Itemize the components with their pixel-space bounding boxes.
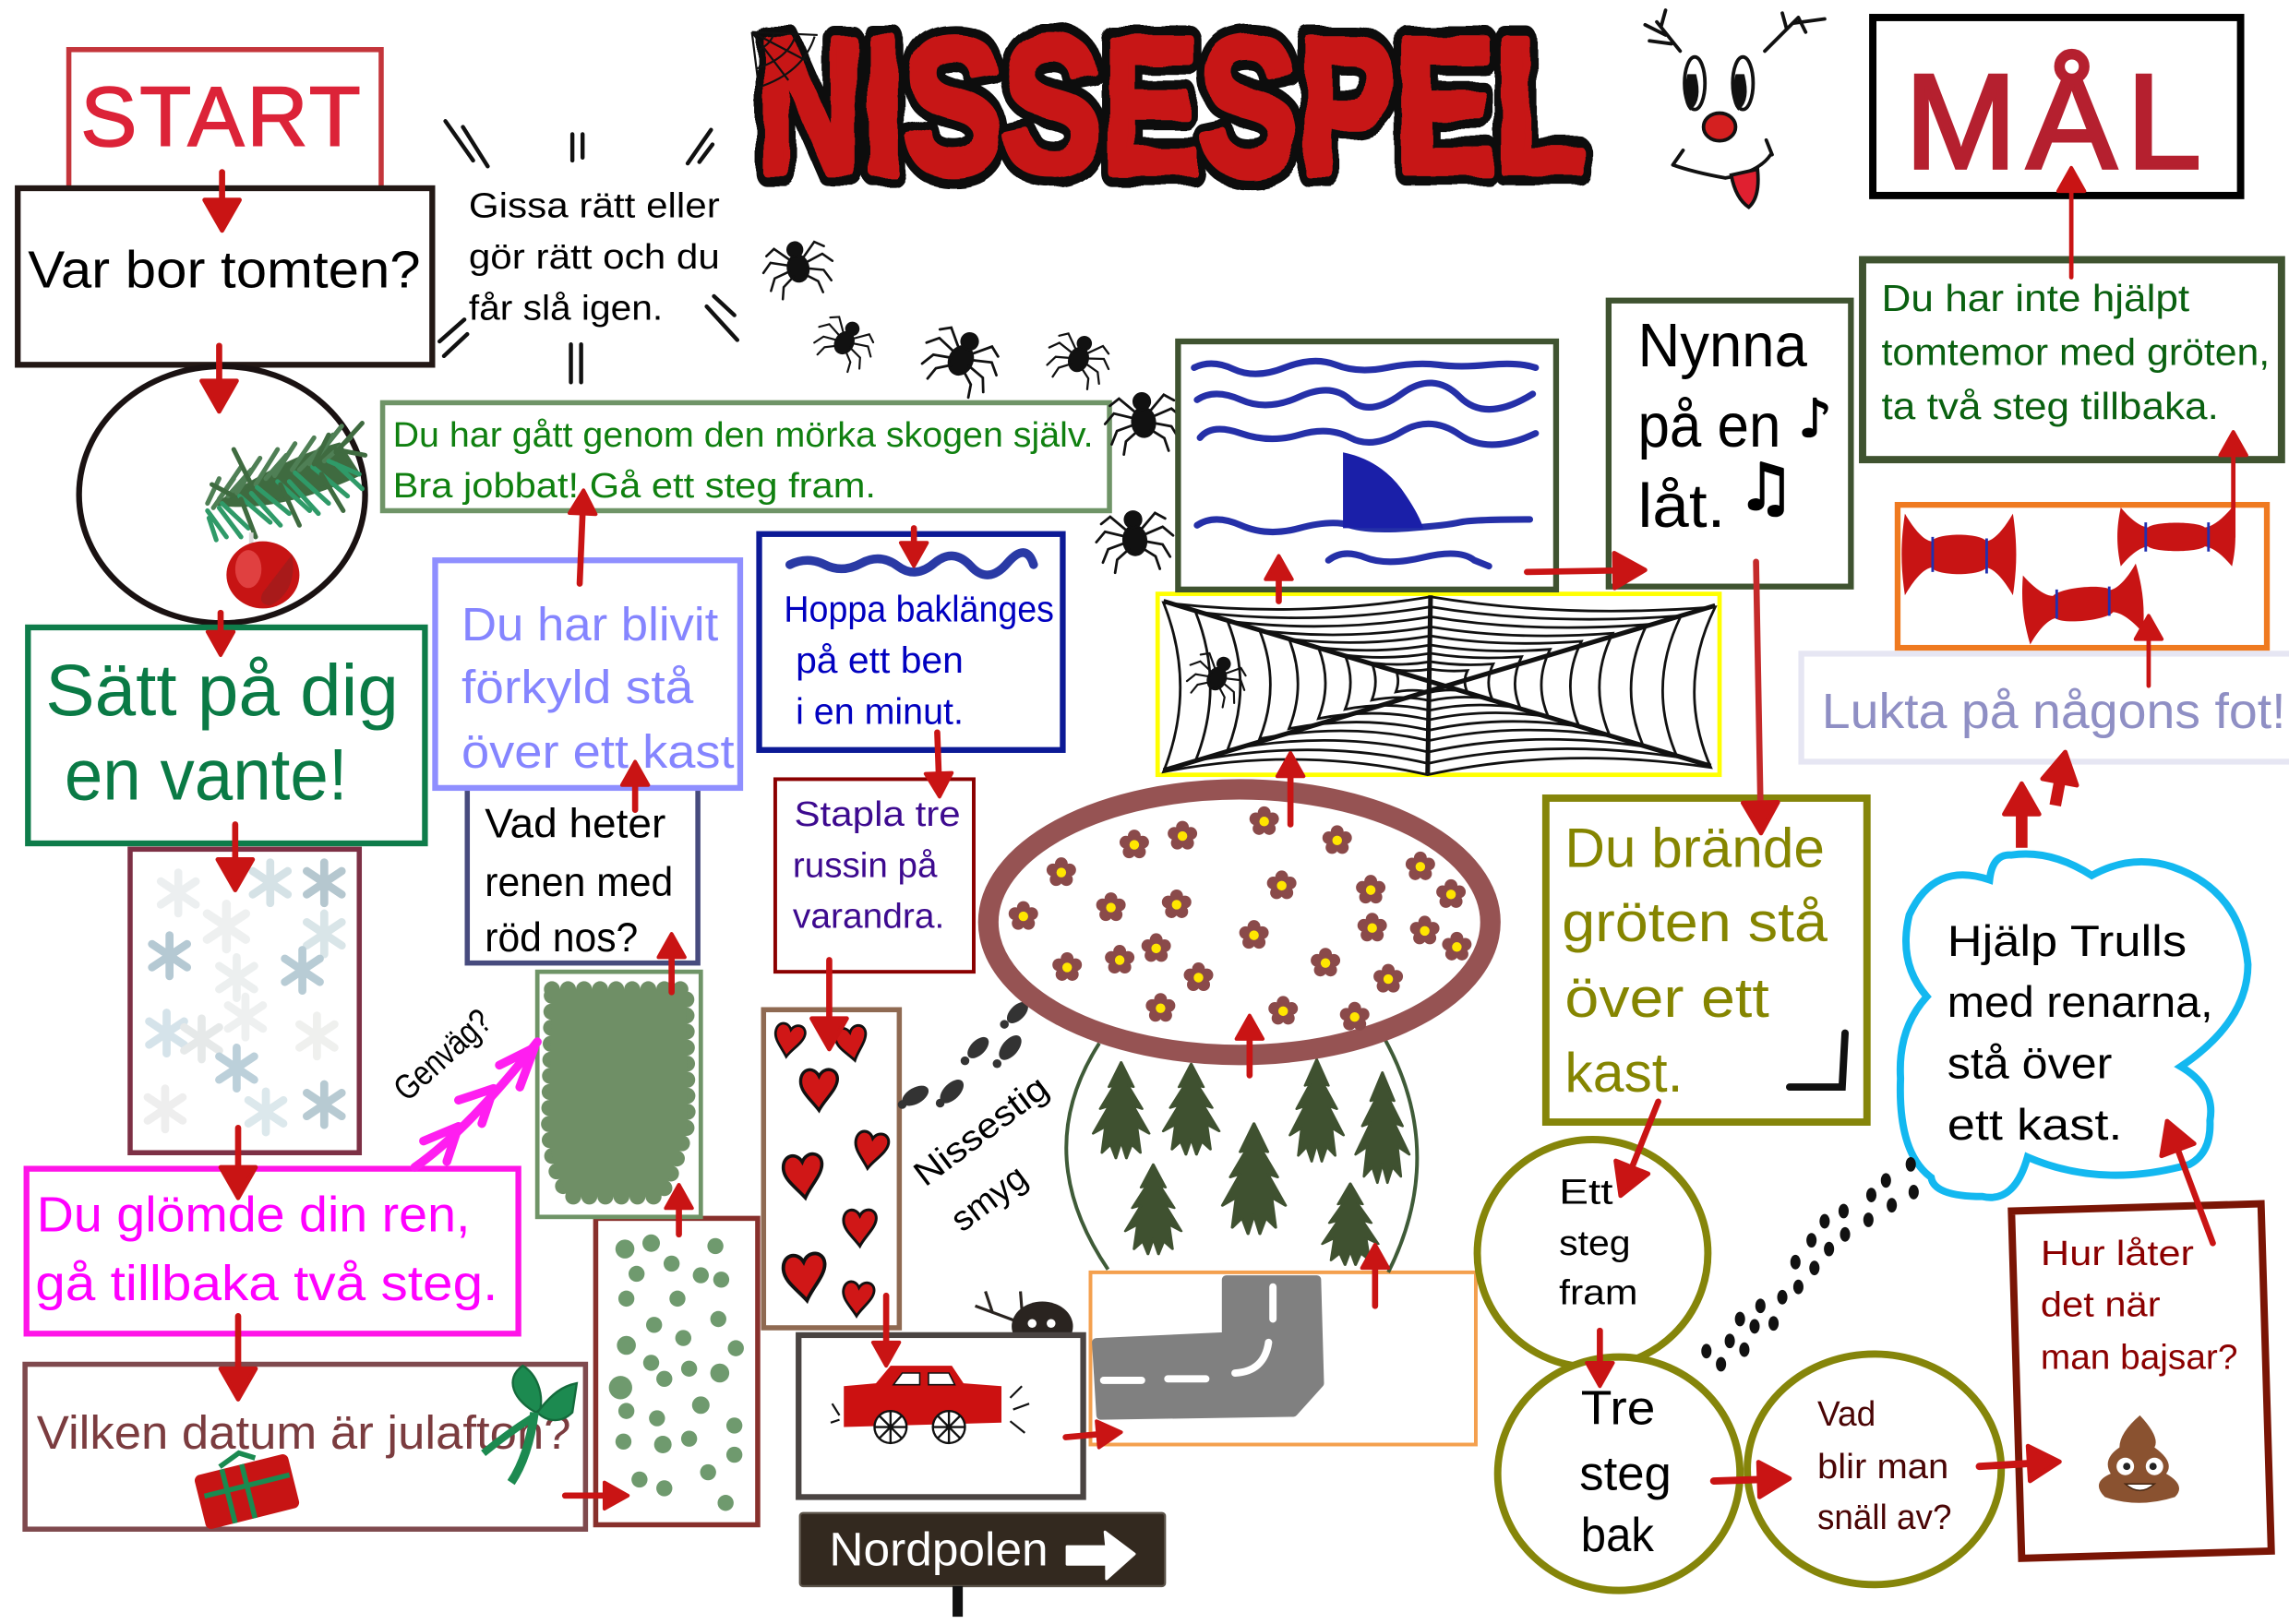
circle: three steps back: bak bbox=[1581, 1509, 1655, 1562]
circle: three steps back bbox=[1498, 1357, 1740, 1591]
panel: jump backwards on one leg: på ett ben bbox=[796, 640, 964, 681]
flower oval bbox=[989, 789, 1491, 1055]
panel: reindeer red nose question bbox=[467, 788, 698, 963]
label: Nisse trail text: Nissestig bbox=[906, 1069, 1056, 1194]
icon: spruce branch bbox=[208, 424, 366, 540]
panel: what it sounds like: man bajsar? bbox=[2041, 1338, 2237, 1377]
panel: reindeer red nose question: röd nos? bbox=[485, 915, 638, 961]
panel: dark forest message: Bra jobbat! Gå ett steg fram. bbox=[393, 467, 876, 506]
icon: gift bbox=[191, 1441, 300, 1530]
title: NISSESPEL bbox=[756, 0, 1586, 214]
cloud: help Trulls: Hjälp Trulls bbox=[1947, 917, 2187, 966]
panel: start bbox=[69, 50, 381, 190]
panel: sea with shark fin bbox=[1178, 341, 1556, 590]
icon: red car bbox=[831, 1366, 1029, 1443]
panel: question, where Santa lives bbox=[18, 188, 432, 364]
circle: one step forward bbox=[1478, 1140, 1708, 1367]
icon: poop bbox=[2099, 1415, 2179, 1503]
panel: car bbox=[798, 1291, 1084, 1497]
panel: jump backwards on one leg: i en minut. bbox=[796, 691, 964, 732]
panel: did not help with the porridge bbox=[1863, 259, 2282, 460]
rules note with rays: gör rätt och du bbox=[469, 238, 720, 277]
label: sneak text: smyg bbox=[944, 1158, 1035, 1239]
circle with spruce branch and bauble bbox=[79, 366, 366, 623]
panel: burnt the porridge bbox=[1546, 798, 1867, 1122]
icon: single note: ♪ bbox=[1798, 388, 1832, 449]
panel: forgot your reindeer: gå tillbaka två steg. bbox=[35, 1256, 497, 1311]
panel: hum a song: Nynna bbox=[1637, 312, 1807, 380]
panel: what it sounds like: Hur låter bbox=[2041, 1235, 2194, 1273]
panel: what it sounds like: det när bbox=[2041, 1285, 2161, 1324]
circle: what makes you kind bbox=[1747, 1354, 2001, 1584]
panel: question, where Santa lives: Var bor tomten? bbox=[28, 241, 421, 300]
icon: spider web in title corner bbox=[752, 32, 818, 90]
arrow: pink shortcut bbox=[414, 1042, 537, 1167]
circle: what makes you kind: snäll av? bbox=[1817, 1499, 1951, 1537]
circle: three steps back: Tre bbox=[1581, 1381, 1655, 1435]
spiders bbox=[759, 236, 1184, 574]
panel: burnt the porridge: gröten stå bbox=[1562, 891, 1828, 953]
panel: snowflakes bbox=[130, 849, 359, 1152]
panel: forgot your reindeer bbox=[27, 1169, 519, 1333]
circle: what makes you kind: blir man bbox=[1817, 1448, 1948, 1487]
panel: dark forest message: Du har gått genom den mörka skogen själv. bbox=[393, 416, 1094, 455]
circle: what makes you kind: Vad bbox=[1817, 1395, 1876, 1434]
panel: burnt the porridge: kast. bbox=[1564, 1042, 1684, 1104]
panel: what it sounds like bbox=[2011, 1204, 2271, 1558]
icon: red bauble bbox=[226, 532, 299, 608]
rules note with rays bbox=[439, 121, 737, 382]
cloud: help Trulls: med renarna, bbox=[1947, 978, 2213, 1027]
icon: reindeer face bbox=[1645, 10, 1825, 208]
path arrows bbox=[219, 173, 2234, 1496]
title: NISSESPEL bbox=[756, 0, 1586, 214]
panel: caught a cold: förkyld stå bbox=[461, 661, 694, 713]
panel: what date is Christmas Eve bbox=[25, 1365, 585, 1530]
panel: green scribble shortcut target bbox=[537, 972, 701, 1217]
cloud: help Trulls bbox=[1900, 854, 2247, 1198]
panel: hum a song bbox=[1609, 301, 1851, 587]
circle: one step forward: steg bbox=[1559, 1224, 1631, 1263]
panel: did not help with the porridge: Du har inte hjälpt bbox=[1882, 277, 2190, 319]
panel: start: START bbox=[80, 70, 361, 164]
panel: jump backwards on one leg: Hoppa baklänges bbox=[784, 590, 1054, 630]
rules note with rays: Gissa rätt eller bbox=[469, 187, 720, 226]
circle: one step forward: fram bbox=[1559, 1274, 1637, 1313]
panel: green dots bbox=[595, 1218, 758, 1524]
panel: caught a cold: över ett kast bbox=[461, 725, 735, 778]
panel: smell someone's foot bbox=[1802, 653, 2289, 761]
panel: what date is Christmas Eve: Vilken datum är julafton? bbox=[37, 1406, 571, 1459]
panel: reindeer red nose question: Vad heter bbox=[485, 802, 665, 847]
panel: spider web bbox=[1157, 594, 1720, 775]
icon: peeking creature bbox=[976, 1291, 1073, 1351]
sign: Nordpolen bbox=[800, 1513, 1165, 1617]
sign: Nordpolen: Nordpolen bbox=[829, 1523, 1049, 1576]
panel: hum a song: låt. bbox=[1637, 472, 1725, 541]
panel: forgot your reindeer: Du glömde din ren, bbox=[37, 1188, 470, 1243]
label: shortcut text: Genväg? bbox=[387, 1002, 499, 1109]
panel: dark forest message bbox=[383, 402, 1109, 510]
panel: burnt the porridge: Du brände bbox=[1564, 817, 1825, 878]
panel: caught a cold: Du har blivit bbox=[461, 598, 718, 651]
panel: stack three raisins: Stapla tre bbox=[794, 795, 961, 834]
panel: stack three raisins: russin på bbox=[793, 846, 938, 885]
cloud: help Trulls: stå över bbox=[1947, 1040, 2112, 1089]
icon: green bow bbox=[484, 1366, 577, 1483]
panel: smell someone's foot: Lukta på någons fot! bbox=[1822, 684, 2286, 739]
circle: three steps back: steg bbox=[1579, 1448, 1672, 1501]
forest bbox=[1066, 1037, 1417, 1272]
circle: one step forward: Ett bbox=[1559, 1174, 1613, 1212]
panel: goal bbox=[1873, 18, 2241, 197]
panel: goal: MÅL bbox=[1905, 46, 2201, 197]
panel: candies bbox=[1898, 505, 2267, 648]
panel: burnt the porridge: över ett bbox=[1564, 967, 1769, 1029]
panel: put on a mitten: Sätt på dig bbox=[45, 649, 399, 731]
panel: reindeer red nose question: renen med bbox=[485, 860, 673, 905]
panel: hum a song: på en bbox=[1637, 392, 1780, 460]
panel: road bbox=[1090, 1272, 1476, 1444]
panel: did not help with the porridge: tomtemor med gröten, bbox=[1882, 330, 2270, 373]
panel: stack three raisins: varandra. bbox=[793, 898, 944, 937]
panel: stack three raisins bbox=[775, 779, 974, 972]
cloud: help Trulls: ett kast. bbox=[1947, 1101, 2122, 1150]
panel: put on a mitten: en vante! bbox=[65, 734, 348, 816]
panel: jump backwards on one leg bbox=[760, 534, 1062, 750]
panel: did not help with the porridge: ta två steg tillbaka. bbox=[1882, 385, 2219, 427]
icon: beamed notes: ♫ bbox=[1737, 450, 1794, 525]
rules note with rays: får slå igen. bbox=[469, 289, 663, 328]
panel: caught a cold bbox=[435, 560, 740, 788]
icon: dotted trail bbox=[1701, 1157, 1919, 1371]
panel: put on a mitten bbox=[28, 627, 425, 843]
panel: hearts bbox=[763, 1009, 899, 1328]
icon: footprints bbox=[898, 998, 1032, 1110]
